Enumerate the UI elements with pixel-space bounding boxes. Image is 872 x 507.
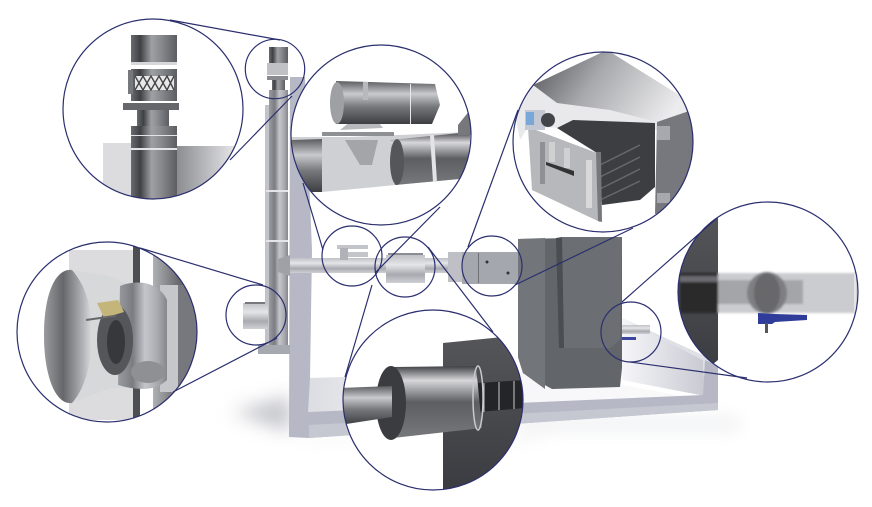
lower collar [131,126,177,150]
support frame [289,77,718,438]
detail: wall passage [344,338,522,489]
mesh band [128,69,177,101]
furnace housing [518,237,622,389]
finned core [557,120,655,205]
rear dark pipe [478,380,525,412]
detail: heat exchanger [516,52,692,222]
gauge [525,110,555,130]
mounting plate [160,285,178,392]
rear tee [458,113,470,135]
filter box [462,252,522,284]
blue actuator [758,313,807,333]
chimney cap [131,35,177,65]
vertical stack [133,246,183,418]
housing top [534,52,687,122]
cone connection [322,124,394,165]
housing side [655,112,692,214]
callout lines [140,20,747,392]
detail: chimney cowl [103,35,234,198]
detail: damper [678,218,858,366]
front narrow pipe [340,386,392,425]
translucent pipe [680,272,858,314]
yellow damper handle [97,300,124,318]
dark wall [443,335,523,490]
housing front [512,85,657,140]
top tank [330,81,440,124]
lower pipe [292,132,470,192]
round collar [97,282,167,389]
large sleeve [376,366,483,440]
main pipe [131,150,177,198]
chimney stack [258,47,290,354]
door plate [528,127,602,222]
inlet shell [44,270,90,404]
horizontal flue pipe [278,245,547,283]
floor shadow [232,396,740,440]
wall slab [69,250,133,420]
dark wall [678,218,718,364]
side inlet nozzle [243,302,268,329]
right side pipe with damper [622,325,650,340]
flange and neck [123,103,179,127]
detail: side inlet [44,246,196,420]
detail: top tank and pipe [292,81,470,192]
small circles [226,39,661,362]
background wall behind chimney [103,143,234,196]
